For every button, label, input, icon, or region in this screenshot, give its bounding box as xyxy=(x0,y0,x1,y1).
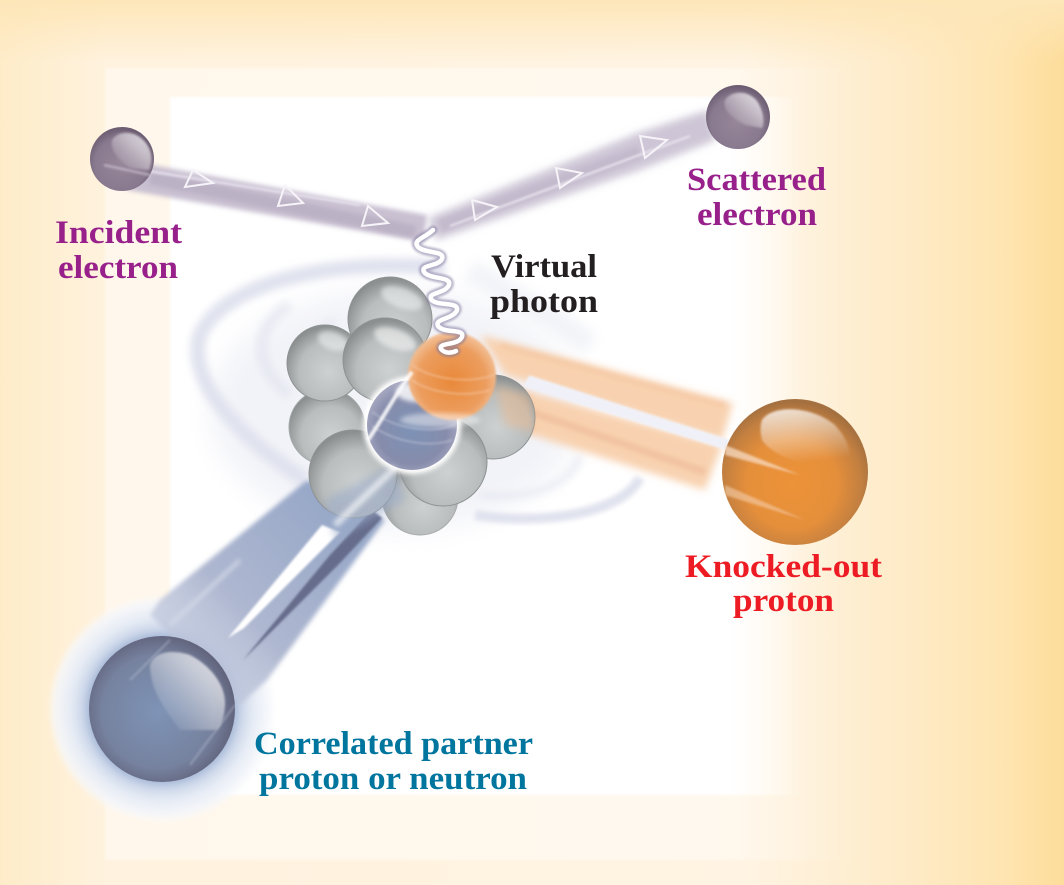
label: scattered electron: Scattered xyxy=(687,162,826,198)
label: knocked-out proton xyxy=(685,549,882,619)
arrowheads on incident beam xyxy=(185,170,388,226)
label: correlated partner: Correlated partner xyxy=(254,726,533,762)
sphere: left upper nucleon xyxy=(287,325,363,401)
label: incident electron: electron xyxy=(58,250,178,286)
sphere: bottom left nucleon xyxy=(309,430,397,518)
sphere: left lower nucleon xyxy=(289,389,365,465)
ball: correlated partner xyxy=(89,636,235,782)
nucleus cluster xyxy=(287,277,535,540)
sphere: right lower nucleon xyxy=(399,418,487,506)
label: incident electron xyxy=(55,215,182,286)
blue beam overlay on nucleus xyxy=(325,465,405,540)
beam: knocked-out proton xyxy=(480,335,760,490)
sphere: right nucleon xyxy=(451,375,535,459)
label: virtual photon xyxy=(490,249,598,320)
orange overlay on right nucleon xyxy=(495,385,535,432)
swirls around nucleus xyxy=(198,266,640,530)
label: incident electron: Incident xyxy=(55,215,182,251)
partner halo xyxy=(49,596,275,822)
label: scattered electron: electron xyxy=(697,197,817,233)
sphere: partner nucleon in nucleus xyxy=(363,376,461,474)
beam: correlated partner xyxy=(150,480,385,705)
sphere: bottom nucleon xyxy=(382,459,458,535)
arrowheads on scattered beam xyxy=(472,136,667,220)
label: correlated partner: proton or neutron xyxy=(259,761,527,797)
beam: scattered electron xyxy=(428,110,716,240)
label: knocked-out proton: Knocked-out xyxy=(685,549,882,585)
ball: scattered electron xyxy=(706,85,770,149)
label: virtual photon: photon xyxy=(490,284,598,320)
label: virtual photon: Virtual xyxy=(491,249,597,285)
virtual photon wavy line xyxy=(416,230,462,353)
label: correlated partner xyxy=(254,726,533,797)
sphere: struck proton xyxy=(400,332,496,427)
nucleus light streaks xyxy=(335,372,412,525)
label: knocked-out proton: proton xyxy=(733,583,834,619)
sphere: middle upper nucleon xyxy=(343,318,427,402)
label: scattered electron xyxy=(687,162,826,233)
beam: incident electron xyxy=(105,162,427,242)
ball: knocked-out proton xyxy=(722,399,868,545)
sphere: top neutron xyxy=(348,277,432,361)
ball: incident electron xyxy=(90,127,154,191)
